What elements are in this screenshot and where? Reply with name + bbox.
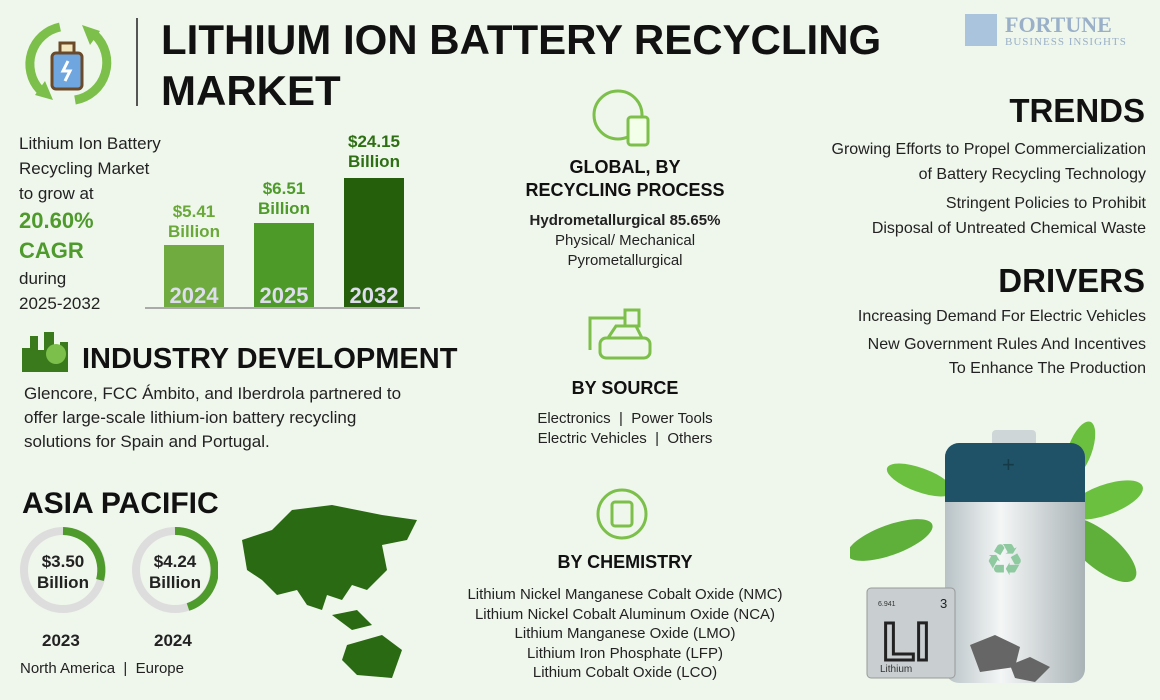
heading: global by recycling process: GLOBAL, BY [570,157,680,177]
heading: trends: TRENDS [1009,92,1145,129]
icon: recycling battery [25,22,112,104]
text: industry development [24,384,401,451]
illustration: battery with leaves: 3 [940,596,947,611]
text: drivers: Increasing Demand For Electric Vehicles New Government Rules And Incentives [858,308,1146,353]
text: sources: Electric Vehicles | Others [538,430,712,447]
logo: FORTUNE [1005,12,1112,37]
heading: global by recycling process [525,157,725,200]
text: CAGR block: 2025-2032 [19,294,100,313]
map: asia pacific [242,505,417,678]
heading: by chemistry: BY CHEMISTRY [557,552,693,572]
text: CAGR block: CAGR [19,238,84,263]
text: chemistries: Lithium Nickel Cobalt Aluminum Oxide (NCA) [475,606,775,622]
heading: global by recycling process: RECYCLING PROCESS [525,180,725,200]
bar chart: 2024 [170,283,218,308]
donut charts: $3.50 Billion [37,552,89,592]
illustration: battery with leaves: ♻ [985,535,1024,586]
text: chemistries: Lithium Iron Phosphate (LFP) [527,644,723,662]
logo: BUSINESS INSIGHTS [1005,36,1127,48]
illustration: battery with leaves: 6.941 [878,601,896,608]
text: industry development: Glencore, FCC Ámbito, and Iberdrola partnered to [24,384,401,403]
text: trends: Growing Efforts to Propel Commercialization [832,141,1146,158]
illustration: battery with leaves: Lithium [880,664,912,675]
bar chart [145,132,420,309]
text: sources [537,410,713,447]
text: trends: of Battery Recycling Technology Stringent Policies to Prohibit [919,166,1146,212]
text: trends [832,141,1146,237]
text: industry development: solutions for Spain and Portugal. [24,432,270,451]
bar chart: 2032 [350,283,398,308]
text: industry development: offer large-scale lithium-ion battery recycling [24,408,356,427]
text: recycling processes [530,212,720,269]
text: recycling processes: Physical/ Mechanical [555,232,695,249]
icon: city [22,332,68,372]
text: chemistries: Lithium Cobalt Oxide (LCO) [533,664,717,681]
bar chart: $24.15 Billion [348,132,400,171]
text: CAGR block: during [19,269,66,288]
title: LITHIUM ION BATTERY RECYCLING MARKET [161,16,881,114]
text: 2023 [42,631,80,650]
text: regions: North America | Europe [20,660,184,677]
illustration: battery with leaves: LI [882,612,930,672]
text: recycling processes: Pyrometallurgical [567,252,683,269]
text: recycling processes: Hydrometallurgical 85.65% [530,212,720,229]
text: 2024 [154,631,192,650]
text: chemistries [467,586,783,681]
illustration: battery with leaves [850,422,1143,683]
text: chemistries: Lithium Nickel Manganese Cobalt Oxide (NMC) [467,586,783,603]
text: CAGR block [19,134,161,313]
text: drivers [858,308,1146,377]
text: CAGR block: Lithium Ion Battery Recycling Market to grow at [19,134,161,203]
text: sources: Electronics | Power Tools [537,410,713,427]
heading: drivers: DRIVERS [998,262,1145,299]
icon: global [592,90,650,146]
logo [965,12,1127,48]
text: trends: Disposal of Untreated Chemical Waste [872,220,1146,237]
donut charts [20,527,218,613]
heading: by source: BY SOURCE [572,378,678,398]
text: drivers: To Enhance The Production [949,360,1146,377]
bar chart: $5.41 Billion [168,202,220,241]
text: CAGR block: 20.60% [19,208,94,233]
icon: chemistry [596,488,648,540]
text: chemistries: Lithium Manganese Oxide (LMO) [515,625,735,642]
bar chart: 2025 [260,283,308,308]
donut charts: $4.24 Billion [149,552,201,592]
heading: asia pacific: ASIA PACIFIC [22,487,219,520]
bar chart: $6.51 Billion [258,179,310,218]
illustration: battery with leaves: + [1002,452,1015,477]
icon: car plug [588,308,652,360]
heading: industry development: INDUSTRY DEVELOPMENT [82,343,457,375]
